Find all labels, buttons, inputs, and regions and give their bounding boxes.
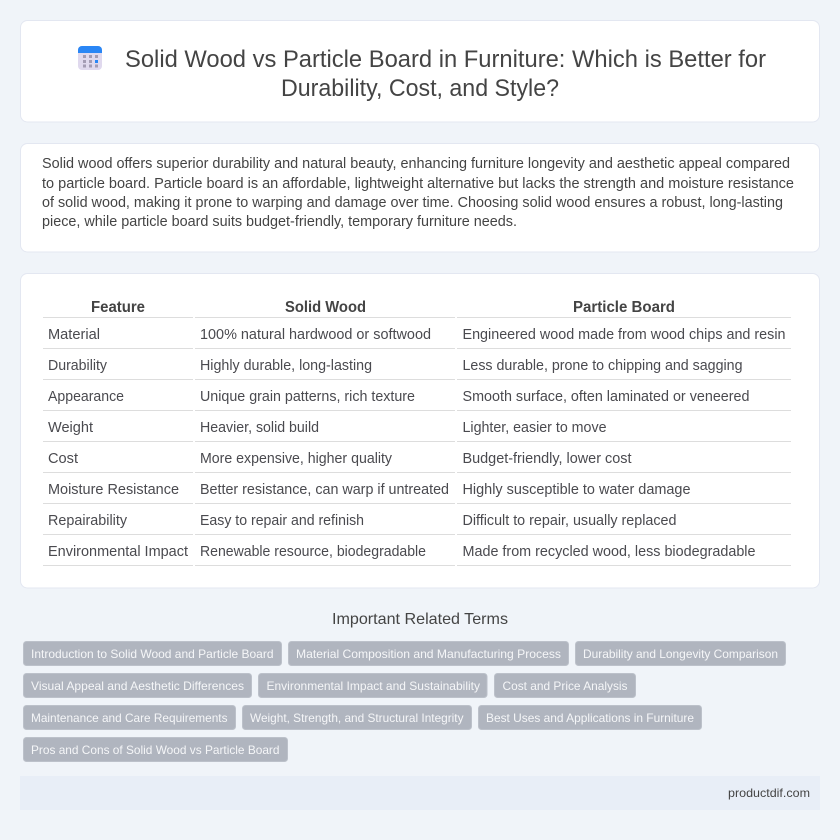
table row: durability: Durability [48, 358, 108, 374]
text block: summary paragraph: Solid wood offers superior durability and natural beauty, enhancing furniture longevity and aesthetic appeal compared [42, 156, 790, 172]
title: Solid Wood vs Particle Board in Furniture: Which is Better for [125, 46, 766, 73]
table row: moisture resistance [43, 482, 791, 504]
table row: repairability: Easy to repair and refinish [200, 513, 364, 529]
table row: environmental impact: Environmental Impact [48, 544, 188, 560]
table header row: Solid Wood [285, 299, 366, 316]
tag: visual appeal [24, 674, 252, 698]
tag: pros and cons [24, 738, 288, 762]
tag: maintenance: Maintenance and Care Requirements [31, 711, 228, 725]
text block: summary paragraph [42, 156, 794, 230]
tag: durability: Durability and Longevity Comparison [583, 647, 778, 661]
panel: related term tags [24, 642, 786, 762]
tag: durability [576, 642, 786, 666]
panel: comparison table [20, 274, 820, 588]
table row: repairability: Difficult to repair, usually replaced [462, 513, 676, 529]
table row: cost [43, 451, 791, 473]
tag: cost and price [494, 674, 636, 698]
table header row: Particle Board [573, 299, 675, 316]
table row: weight: Heavier, solid build [200, 420, 319, 436]
table row: moisture resistance: Better resistance, can warp if untreated [200, 482, 449, 498]
tag: material composition: Material Composition and Manufacturing Process [296, 647, 561, 661]
tag: material composition [288, 642, 568, 666]
text block: summary paragraph: of solid wood, making it prone to warping and damage over time. Choosing solid wood ensures a robust, long-lasting [42, 195, 783, 211]
footer source text: productdif.com [728, 786, 810, 800]
table row: material: Material [48, 327, 100, 343]
table row: repairability [43, 513, 791, 535]
table row: material: 100% natural hardwood or softwood [200, 327, 431, 343]
tag: environmental impact [258, 674, 487, 698]
table row: weight: Weight [48, 420, 93, 436]
panel: summary text [20, 144, 820, 252]
table row: repairability: Repairability [48, 513, 128, 529]
tag: best uses [478, 706, 702, 730]
tag: pros and cons: Pros and Cons of Solid Wood vs Particle Board [31, 743, 280, 757]
icon: calendar [78, 46, 102, 70]
table row: durability: Highly durable, long-lasting [200, 358, 372, 374]
table row: weight [43, 420, 791, 442]
title [125, 46, 766, 102]
tag: introduction: Introduction to Solid Wood and Particle Board [31, 647, 274, 661]
table header row [43, 299, 791, 318]
table row: appearance: Smooth surface, often laminated or veneered [462, 389, 750, 405]
tag: environmental impact: Environmental Impact and Sustainability [266, 679, 480, 693]
tag: maintenance [24, 706, 236, 730]
table row: material: Engineered wood made from wood chips and resin [462, 327, 786, 343]
tag: cost and price: Cost and Price Analysis [502, 679, 628, 693]
table row: cost: More expensive, higher quality [200, 451, 393, 467]
panel: title header [20, 20, 820, 122]
table row: weight: Lighter, easier to move [462, 420, 606, 436]
table row: environmental impact [43, 544, 791, 566]
tag: best uses: Best Uses and Applications in Furniture [486, 711, 694, 725]
table row: environmental impact: Made from recycled wood, less biodegradable [462, 544, 756, 560]
table header row: Feature [91, 299, 145, 316]
table row: durability [43, 358, 791, 380]
table row: cost: Cost [48, 451, 78, 467]
table row: appearance: Unique grain patterns, rich texture [200, 389, 415, 405]
table row: moisture resistance: Highly susceptible to water damage [462, 482, 690, 498]
table row: moisture resistance: Moisture Resistance [48, 482, 179, 498]
table row: cost: Budget-friendly, lower cost [462, 451, 632, 467]
footer [20, 776, 820, 810]
tag: visual appeal: Visual Appeal and Aesthetic Differences [31, 679, 244, 693]
tag: weight and strength: Weight, Strength, and Structural Integrity [250, 711, 464, 725]
tag: weight and strength [242, 706, 472, 730]
table row: environmental impact: Renewable resource, biodegradable [200, 544, 426, 560]
text block: summary paragraph: piece, while particle board suits budget-friendly, temporary furniture needs. [42, 214, 517, 230]
tag: introduction [24, 642, 282, 666]
title: Durability, Cost, and Style? [281, 75, 559, 102]
table row: appearance: Appearance [48, 389, 124, 405]
table row: appearance [43, 389, 791, 411]
text block: summary paragraph: to particle board. Particle board is an affordable, lightweight alternative but lacks the strength and moisture resistance [42, 176, 794, 192]
heading: important related terms: Important Related Terms [332, 611, 508, 628]
table row: durability: Less durable, prone to chipping and sagging [462, 358, 742, 374]
table row: material [43, 327, 791, 349]
